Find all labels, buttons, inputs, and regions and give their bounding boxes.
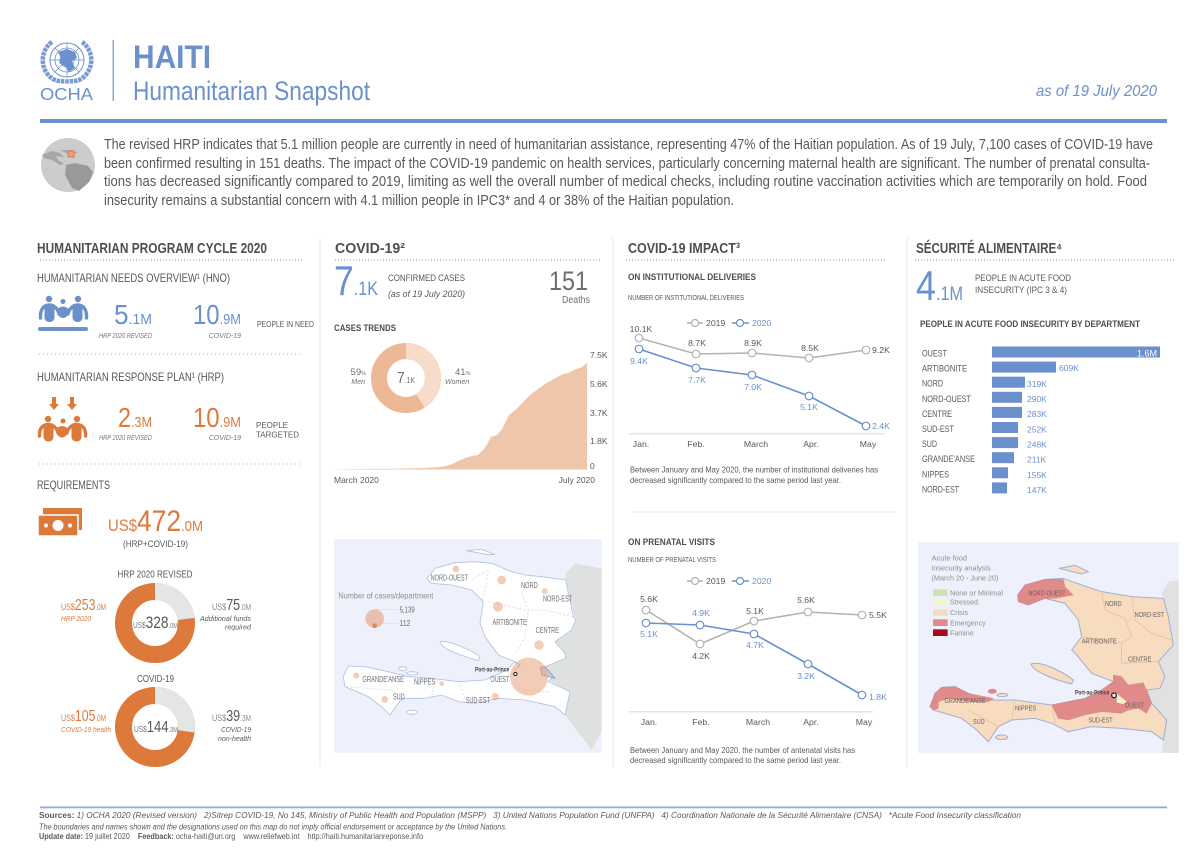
stat: COVID-19 health: COVID-19 health [61,725,111,734]
panel: humanitarian program cycle [37,241,314,758]
stat: deaths [549,266,590,306]
bar chart: departments: ARTIBONITE [922,364,967,374]
update and feedback: Update date: 19 juillet 2020 Feedback: ocha-haiti@un.org www.reliefweb.int http://haiti.humanitarianreponse.info [39,831,423,841]
line chart: institutional deliveries: 8.9K [744,338,762,348]
donut: HRP 2020 revised [124,592,186,654]
bar chart: departments: 319K [1027,379,1047,389]
caption: COVID-19 [209,435,241,442]
heading: COVID-19² [335,241,405,257]
stat: COVID-19 non-health: COVID-19 [221,725,252,734]
map: cases by department: 112 [400,619,411,628]
bar chart: departments: 283K [1027,409,1047,419]
area chart: cases [334,350,608,485]
label men [351,367,366,386]
map: acute food insecurity: Crisis [950,608,968,617]
map: acute food insecurity: NIPPES [1015,703,1036,712]
line chart: institutional deliveries: Feb. [687,439,705,449]
line chart: prenatal visits: May [856,717,873,727]
map: cases by department: 5,139 [400,606,415,615]
bar chart: departments: 252K [1027,424,1047,434]
map: cases by department: CENTRE [536,626,559,635]
label [256,421,299,440]
line chart: prenatal visits: 5.1K [746,606,764,616]
chart caption: NUMBER OF INSTITUTIONAL DELIVERIES [628,295,744,302]
Dominican Republic [545,563,602,750]
map: cases by department: NORD [521,581,538,590]
area chart: cases: 7.5K [590,350,608,360]
line chart: prenatal visits: 4.7K [746,640,764,650]
bar chart: departments: SUD [922,439,937,449]
bar chart: departments: SUD-EST [922,424,954,434]
header [40,39,1167,123]
map: acute food insecurity: None or Minimal [950,589,1003,598]
area chart: cases: 5.6K [590,379,608,389]
date: as of 19 July 2020 [1036,83,1157,100]
bar chart: departments: 155K [1027,470,1047,480]
header rule [40,119,1167,123]
label: INSECURITY (IPC 3 & 4) [975,285,1067,296]
line chart: prenatal visits: 5.6K [797,595,815,605]
label: TARGETED [256,430,299,440]
stat: COVID-19 non-health: US$39.3M [212,708,251,725]
area chart: cases: 3.7K [590,408,608,418]
chart note [630,745,856,765]
stat: HRP 2020: HRP 2020 [61,614,92,623]
Haiti landmass [343,549,576,715]
HRP heading: HUMANITARIAN RESPONSE PLAN¹ (HRP) [37,370,224,384]
map: acute food insecurity: SUD-EST [1088,715,1113,724]
stat: COVID-19 non-health [212,708,252,743]
map: acute food insecurity: Stressed [950,598,978,607]
donut heading: COVID-19 [137,673,174,685]
line chart: institutional deliveries: 9.2K [872,345,890,355]
heading: COVID-19 IMPACT³ [628,241,740,257]
stat: 5.1M in need: 5.1M [114,299,152,330]
stat: additional funds: required [225,622,252,632]
icon: globe locator [41,138,95,192]
label women: Women [445,379,469,386]
bar chart: departments: NORD-EST [922,484,959,494]
panel: COVID-19 impact [626,241,897,765]
map: acute food insecurity: Famine [950,629,974,638]
bar chart: departments: GRANDE'ANSE [922,454,975,464]
title: HAITI [133,39,211,75]
panel: food security [915,240,1179,753]
area chart: cases: July 2020 [559,475,595,485]
line chart: institutional deliveries: 9.4K [630,356,648,366]
line chart: institutional deliveries: 2.4K [872,421,890,431]
label women [445,367,471,386]
column separators [320,238,907,767]
stat: HRP 2020: US$253.0M [61,597,106,614]
map: cases by department: OUEST [490,675,509,684]
line chart: prenatal visits: Feb. [692,717,710,727]
line chart: institutional deliveries: 2019 [706,318,725,328]
stat: people in food insecurity: 4.1M [916,262,963,309]
line chart: prenatal visits: 2019 [706,576,725,586]
emergency areas [930,579,1152,720]
stat: additional funds [199,597,252,632]
label: PEOPLE [256,421,288,430]
stat: 10.9M targeted: 10.9M [193,402,241,433]
subheading: ON INSTITUTIONAL DELIVERIES [628,272,756,283]
HNO heading: HUMANITARIAN NEEDS OVERVIEW¹ (HNO) [37,271,230,285]
line chart: institutional deliveries: 2020 [752,318,771,328]
map: acute food insecurity: NORD [1105,599,1122,608]
donut: sex split [379,351,433,405]
map: cases by department: SUD-EST [466,696,490,705]
map: cases by department: Number of cases/department [338,592,434,601]
icon: people in need [38,296,88,331]
line chart: institutional deliveries: 8.5K [801,343,819,353]
bar chart: departments: NORD-OUEST [922,394,971,404]
bar chart: departments: 1.6M [1137,348,1157,358]
line chart: institutional deliveries: 10.1K [630,324,653,334]
caption: HRP 2020 REVISED [99,435,152,442]
icon: banknotes [38,508,82,536]
icon: UN OCHA logo [40,42,93,104]
map: cases by department: GRANDE'ANSE [362,675,404,684]
map: acute food insecurity: Acute food [932,553,967,562]
line chart: prenatal visits: 5.6K [640,594,658,604]
stat: additional funds: US$75.0M [212,597,251,614]
line chart: prenatal visits: 5.5K [869,610,887,620]
map: acute food insecurity [918,542,1179,753]
line chart: institutional deliveries: Jan. [633,439,649,449]
divider line [112,40,114,101]
map: cases by department [334,539,602,753]
heading: SÉCURITÉ ALIMENTAIRE⁴ [916,240,1062,257]
donut heading: HRP 2020 REVISED [118,568,193,580]
Dominican Republic [1147,580,1179,753]
bar chart: departments: NIPPES [922,469,949,479]
bar chart: departments: 290K [1027,394,1047,404]
caption: COVID-19 [209,333,241,340]
label [388,273,465,300]
map: acute food insecurity: GRANDE'ANSE [944,696,986,705]
line chart: prenatal visits: Apr. [803,717,819,727]
chart caption: NUMBER OF PRENATAL VISITS [628,557,716,564]
line chart: institutional deliveries: 7.7K [688,375,706,385]
intro paragraph: insecurity remains a substantial concern with 4.1 million people in IPC3* and 4 or 38% of the Haitian population. [104,193,734,209]
donut: COVID-19 [124,696,186,758]
line chart: institutional deliveries: Apr. [803,439,819,449]
bar chart: departments: 147K [1027,485,1047,495]
stat: additional funds: Additional funds [199,614,251,623]
donut total: US$144.3M [134,719,178,736]
caption: HRP 2020 REVISED [99,333,152,340]
stat: 2.3M targeted: 2.3M [118,402,152,433]
line chart: prenatal visits [629,576,887,727]
Haiti crisis base [930,565,1173,742]
stat: COVID-19 health [61,708,111,734]
icon: UN OCHA logo: OCHA [40,84,93,104]
stat: confirmed cases: 7.1K [334,257,378,304]
donut total: US$328.0M [133,613,178,632]
stat: deaths: 151 [549,266,588,296]
bar chart: departments: 211K [1027,454,1047,464]
caption: (HRP+COVID-19) [123,539,188,550]
line chart: prenatal visits: 5.1K [640,629,658,639]
chart note: decreased significantly compared to the same period last year. [630,755,841,765]
map: cases by department: NIPPES [414,677,435,686]
map: acute food insecurity: ARTIBONITE [1082,637,1117,646]
line chart: prenatal visits: 2020 [752,576,771,586]
label: (as of 19 July 2020) [388,289,465,300]
map: acute food insecurity: insecurity analysis [932,564,991,573]
map: acute food insecurity: NORD-EST [1135,610,1164,619]
bar chart: departments: NORD [922,379,943,389]
requirements heading: REQUIREMENTS [37,480,110,492]
subheading: ON PRENATAL VISITS [628,537,715,548]
label women: 41% [455,367,471,378]
label: PEOPLE IN NEED [257,320,314,329]
line chart: prenatal visits: March [746,717,770,727]
label: CONFIRMED CASES [388,273,465,284]
map: cases by department: NORD-OUEST [431,573,468,582]
line chart: prenatal visits: 3.2K [797,671,815,681]
area chart: cases: 0 [590,461,595,471]
line chart: prenatal visits: 4.2K [692,651,710,661]
map: acute food insecurity: SUD [973,717,985,726]
chart note: Between January and May 2020, the number of institutional deliveries has [630,464,879,474]
donut total: 7.1K [397,370,416,387]
chart note: Between January and May 2020, the number of antenatal visits has [630,745,856,755]
map: acute food insecurity: Port-au-Prince [1075,689,1110,696]
stat: COVID-19 non-health: non-health [218,734,251,743]
bar chart: departments: 609K [1059,363,1079,373]
line chart: prenatal visits: 4.9K [692,608,710,618]
chart note: decreased significantly compared to the same period last year. [630,475,841,485]
line chart: institutional deliveries: 8.7K [688,338,706,348]
line chart: prenatal visits: 1.8K [869,692,887,702]
icon: people targeted [39,397,86,442]
stat: COVID-19 health: US$105.0M [61,708,106,725]
label: PEOPLE IN ACUTE FOOD [975,273,1071,284]
bar chart: departments: OUEST [922,348,947,358]
panel: COVID-19 [334,241,608,753]
line chart: institutional deliveries: 7.0K [744,382,762,392]
bar chart: departments [922,346,1160,495]
sources: Sources: 1) OCHA 2020 (Revised version) 2)Sitrep COVID-19, No 145, Ministry of Public Health and Population (MSPP) 3) United Nations Population Fund (UNFPA) 4) Coordination Nationale de la Sécurité Alimentaire (CNSA) *Acute Food Insecurity classification [39,810,1021,820]
subtitle: Humanitarian Snapshot [133,76,370,106]
stat: HRP 2020 [61,597,106,623]
heading: HUMANITARIAN PROGRAM CYCLE 2020 [37,241,267,257]
label men: 59% [351,367,366,378]
intro paragraph [104,137,1153,209]
line chart: prenatal visits: Jan. [641,717,657,727]
map: cases by department: ARTIBONITE [492,618,527,627]
map: cases by department: NORD-EST [543,594,572,603]
line chart: institutional deliveries: 5.1K [800,402,818,412]
line chart: institutional deliveries: March [744,439,768,449]
map: acute food insecurity: NORD-OUEST [1028,589,1066,598]
map: acute food insecurity: (March 20 - June 20) [932,574,999,583]
label men: Men [351,379,365,386]
bar chart: departments: 248K [1027,440,1047,450]
area chart: cases: 1.8K [590,436,608,446]
disclaimer: The boundaries and names shown and the designations used on this map do not imply official endorsement or acceptance by the United Nations. [39,822,507,832]
stat: total requirements: US$472.0M [108,505,203,538]
map: acute food insecurity: OUEST [1125,700,1144,709]
line chart: institutional deliveries: May [860,439,877,449]
area chart: cases: March 2020 [334,475,379,485]
subheading: PEOPLE IN ACUTE FOOD INSECURITY BY DEPARTMENT [920,319,1140,330]
chart note [630,464,879,485]
stat: deaths: Deaths [562,295,590,306]
footer [39,806,1167,841]
map: acute food insecurity: CENTRE [1128,654,1151,663]
label [975,273,1071,296]
subheading: CASES TRENDS [334,323,396,334]
map: cases by department: Port-au-Prince [475,666,510,673]
bar chart: departments: CENTRE [922,409,952,419]
map: acute food insecurity: Emergency [950,618,986,627]
stat: 10.9M in need: 10.9M [193,299,241,330]
map: cases by department: SUD [393,693,405,702]
line chart: institutional deliveries [629,318,890,449]
legend [933,589,948,596]
